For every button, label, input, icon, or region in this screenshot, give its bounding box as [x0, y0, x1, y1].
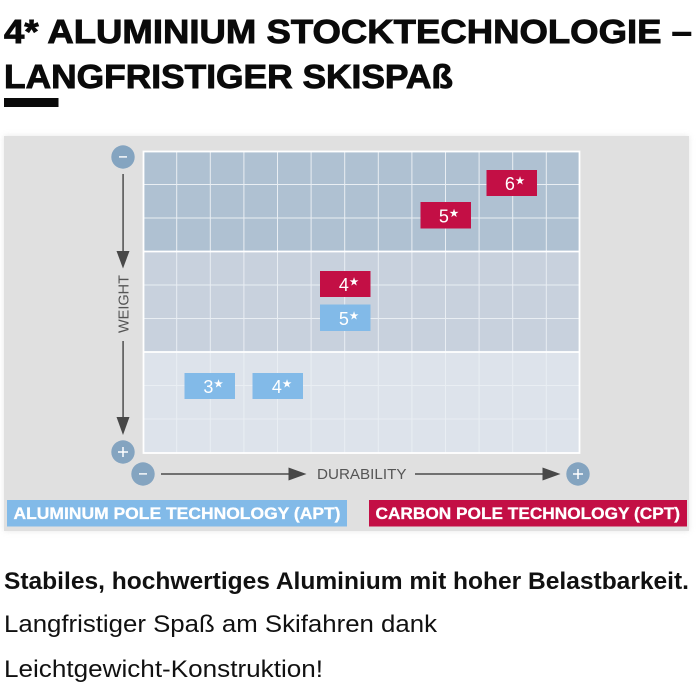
badge: aluminum 3 star: 3	[203, 377, 213, 397]
chart grid	[143, 151, 580, 453]
legend: carbon pole technology: CARBON POLE TECHNOLOGY (CPT)	[376, 505, 680, 523]
arrow: weight upper	[116, 174, 130, 268]
icon: durability minus	[131, 462, 155, 486]
badge: carbon 5 star	[420, 202, 471, 228]
arrow: durability right	[415, 468, 560, 480]
icon: durability plus	[566, 462, 590, 486]
badge: aluminum 5 star: ★	[349, 310, 359, 322]
title	[4, 14, 692, 96]
legend: aluminum pole technology	[7, 500, 347, 526]
text block: description	[4, 568, 689, 683]
band: medium weight	[143, 252, 580, 352]
badge: carbon 6 star: 6	[505, 174, 515, 194]
badge: aluminum 3 star: ★	[213, 378, 224, 390]
band: heavy weight	[143, 151, 580, 252]
title underline bar	[4, 98, 58, 107]
text block: description: Stabiles, hochwertiges Aluminium mit hoher Belastbarkeit.	[4, 568, 689, 595]
badge: aluminum 4 star: 4	[272, 377, 282, 397]
badge: carbon 4 star: 4	[339, 275, 349, 295]
badge: aluminum 5 star: 5	[339, 309, 349, 329]
badge: aluminum 5 star	[320, 304, 370, 331]
axis label: durability: DURABILITY	[317, 467, 407, 483]
panel: chart background	[4, 136, 689, 531]
badge: aluminum 4 star: ★	[282, 378, 292, 390]
badge: carbon 4 star	[320, 271, 370, 297]
axis label: weight: WEIGHT	[116, 275, 132, 333]
badge: carbon 6 star	[486, 170, 537, 196]
text block: description: Langfristiger Spaß am Skifahren dank	[4, 611, 438, 638]
legend: carbon pole technology	[369, 500, 687, 526]
band: light weight	[143, 352, 580, 453]
icon: weight minus	[111, 145, 135, 169]
title: 4* ALUMINIUM STOCKTECHNOLOGIE –	[4, 14, 692, 51]
icon: weight plus	[111, 440, 135, 464]
arrow: durability left	[161, 468, 306, 480]
badge: aluminum 4 star	[252, 373, 303, 399]
title: LANGFRISTIGER SKISPAß	[4, 59, 453, 96]
arrow: weight lower	[116, 341, 130, 435]
badge: carbon 4 star: ★	[349, 276, 359, 288]
badge: carbon 6 star: ★	[515, 176, 525, 188]
badge: carbon 5 star: ★	[449, 208, 459, 220]
badge: aluminum 3 star	[184, 373, 235, 399]
badge: carbon 5 star: 5	[439, 206, 449, 226]
text block: description: Leichtgewicht-Konstruktion!	[4, 656, 323, 683]
legend: aluminum pole technology: ALUMINUM POLE TECHNOLOGY (APT)	[14, 505, 340, 523]
